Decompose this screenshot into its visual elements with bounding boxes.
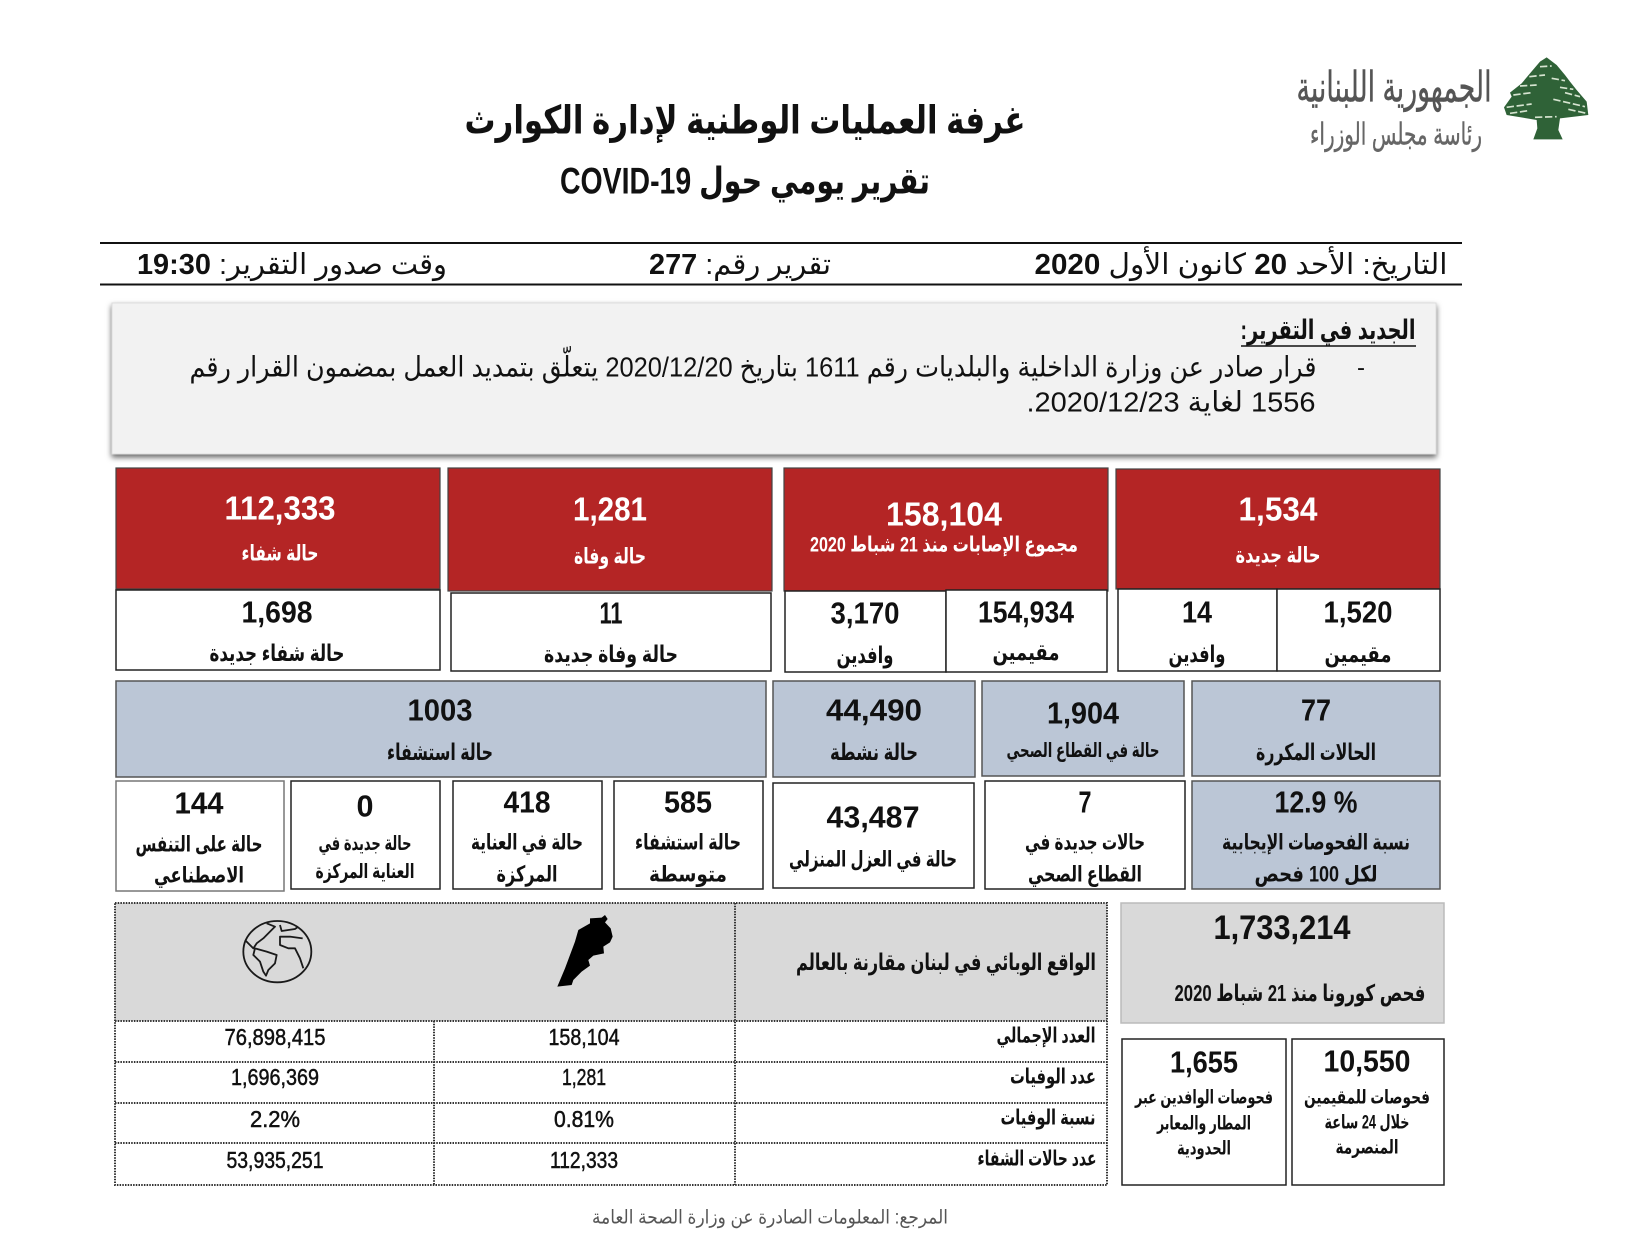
row: deaths: عدد الوفيات [1010,1066,1096,1088]
in intensive care: حالة في العناية [471,830,583,856]
total cases since 21 Feb 2020: مجموع الإصابات منذ 21 شباط 2020 [810,534,1078,556]
residents tests label: فحوصات للمقيمين [1304,1088,1430,1108]
arrivals tests label: فحوصات الوافدين عبر [1134,1088,1273,1108]
total residents: مقيمين [992,639,1060,666]
hospital cases total: حالة استشفاء [387,739,493,765]
panel: total cases [784,468,1108,672]
hospital cases total [116,681,766,777]
repeated cases: 77 [1301,692,1331,728]
health sector total: حالة في القطاع الصحي [1006,740,1160,763]
residents tests label: المنصرمة [1336,1138,1398,1158]
new cases total: حالة جديدة [1236,542,1320,568]
row: total: 76,898,415 [224,1024,326,1050]
positivity rate: 12.9 % [1274,784,1358,820]
arrivals tests label: المطار والمعابر [1156,1114,1251,1134]
logo text: presidency: رئاسة مجلس الوزراء [1310,118,1482,152]
residents tests label: خلال 24 ساعة [1324,1112,1410,1134]
row: deaths: 1,281 [562,1064,606,1090]
moderate hospital cases: متوسطة [649,862,727,888]
row: total: 158,104 [548,1024,620,1050]
report time: وقت صدور التقرير: 19:30 [137,249,447,281]
row: deaths: 1,696,369 [231,1064,319,1090]
panel: new in the report [112,303,1436,454]
new in intensive care: حالة جديدة في [318,833,412,856]
icon: Lebanon map [557,915,613,987]
new recovered [116,590,440,670]
new arrivals: 14 [1182,594,1213,630]
row: fatality rate [250,1106,1096,1132]
health sector total [982,681,1184,776]
repeated cases [1192,681,1440,776]
total arrivals: 3,170 [830,596,900,630]
panel: comparison table Lebanon vs world [115,903,1107,1185]
icon: globe [243,921,311,982]
positivity rate: لكل 100 فحص [1254,862,1378,886]
row: recoveries: عدد حالات الشفاء [978,1148,1096,1170]
arrivals tests number: 1,655 [1170,1044,1238,1080]
row: fatality rate: 0.81% [554,1106,614,1132]
residents tests label [1304,1088,1430,1158]
on ventilator: 144 [174,786,224,820]
new deaths: 11 [600,596,622,630]
recovered total: 112,333 [224,490,336,526]
total residents [946,590,1107,672]
report date: التاريخ: الأحد 20 كانون الأول 2020 [1034,245,1448,281]
report info bar [100,243,1462,284]
panel: repeated cases and positivity [1192,681,1440,889]
body line two: 1556 لغاية 2020/12/23. [1026,386,1316,418]
deaths total: 1,281 [573,490,647,528]
hospital cases total: 1003 [408,692,472,728]
body line one: قرار صادر عن وزارة الداخلية والبلديات رقم 1611 بتاريخ 2020/12/20 يتعلّق بتمديد العمل بمضمون القرار رقم [190,345,1317,384]
active total: 44,490 [826,692,922,728]
residents tests number: 10,550 [1324,1044,1410,1078]
row: deaths [231,1064,1096,1090]
panel: new cases [1116,469,1440,671]
bullet dash: - [1357,354,1365,382]
moderate hospital cases [614,781,763,889]
new recovered: 1,698 [242,594,312,630]
new in intensive care: العناية المركزة [316,861,414,883]
moderate hospital cases: حالة استشفاء [635,830,741,854]
repeated cases: الحالات المكررة [1256,739,1376,766]
home isolation: 43,487 [826,800,920,834]
total arrivals: وافدين [836,642,894,669]
recovered total [116,468,440,589]
new residents: مقيمين [1324,641,1392,668]
on ventilator: الاصطناعي [154,862,244,888]
home isolation [773,783,974,888]
new deaths: حالة وفاة جديدة [544,641,678,668]
panel: residents tests [1292,1039,1444,1185]
moderate hospital cases: 585 [664,784,712,820]
total cases since 21 Feb 2020 [784,468,1108,591]
new cases total [1116,469,1440,589]
row: total [224,1024,1096,1050]
row: fatality rate: نسبة الوفيات [1000,1106,1096,1130]
new arrivals [1118,589,1277,671]
health sector total: 1,904 [1047,696,1120,730]
new cases total: 1,534 [1238,490,1318,528]
new in health sector: 7 [1078,784,1092,820]
deaths total: حالة وفاة [574,544,646,570]
row: total: العدد الإجمالي [996,1024,1096,1048]
table heading: الواقع الوبائي في لبنان مقارنة بالعالم [796,949,1096,976]
row: recoveries: 53,935,251 [226,1147,324,1173]
panel: active cases [773,681,975,888]
logo: Lebanese Republic presidency of council of ministers [1296,57,1588,152]
new in health sector: حالات جديدة في [1025,830,1145,856]
total tests number: 1,733,214 [1214,909,1351,947]
recovered total: حالة شفاء [242,540,318,566]
panel: recovered [116,468,440,670]
new in intensive care: 0 [356,788,374,824]
in intensive care: 418 [504,784,550,820]
deaths total [448,468,772,591]
row: recoveries: 112,333 [550,1147,618,1173]
total arrivals [785,591,946,672]
panel: hospitalised [116,681,766,891]
subtitle: تقرير يومي حول COVID-19 [560,160,930,202]
in intensive care: المركزة [496,862,558,888]
source footer: المرجع: المعلومات الصادرة عن وزارة الصحة العامة [592,1208,948,1228]
new arrivals: وافدين [1168,641,1226,668]
total tests label: فحص كورونا منذ 21 شباط 2020 [1174,980,1426,1007]
arrivals tests label: الحدودية [1177,1138,1231,1160]
new residents: 1,520 [1324,594,1392,630]
new deaths [451,593,771,671]
panel: deaths [448,468,772,671]
on ventilator: حالة على التنفس [136,832,262,856]
total cases since 21 Feb 2020: 158,104 [886,496,1003,532]
report number: تقرير رقم: 277 [649,249,831,282]
row: recoveries [226,1147,1096,1173]
new in health sector: القطاع الصحي [1028,862,1142,888]
panel: arrivals tests [1122,1039,1286,1185]
row: fatality rate: 2.2% [250,1106,300,1132]
positivity rate [1192,781,1440,889]
in intensive care [453,781,602,889]
new recovered: حالة شفاء جديدة [210,640,344,666]
new in intensive care [291,781,440,889]
new in health sector [985,781,1185,889]
panel: health sector [982,681,1185,889]
heading: new in report: الجديد في التقرير: [1240,315,1416,346]
active total [773,681,975,777]
on ventilator [116,781,284,891]
active total: حالة نشطة [830,739,918,765]
home isolation: حالة في العزل المنزلي [789,846,957,872]
panel: total tests [1121,903,1444,1023]
total residents: 154,934 [978,594,1075,630]
logo text: republic name: الجمهورية اللبنانية [1296,64,1492,112]
arrivals tests label [1134,1088,1273,1160]
icon: cedar tree [1504,57,1588,139]
title: غرفة العمليات الوطنية لإدارة الكوارث [464,100,1026,144]
positivity rate: نسبة الفحوصات الإيجابية [1222,830,1410,856]
new residents [1277,589,1440,671]
